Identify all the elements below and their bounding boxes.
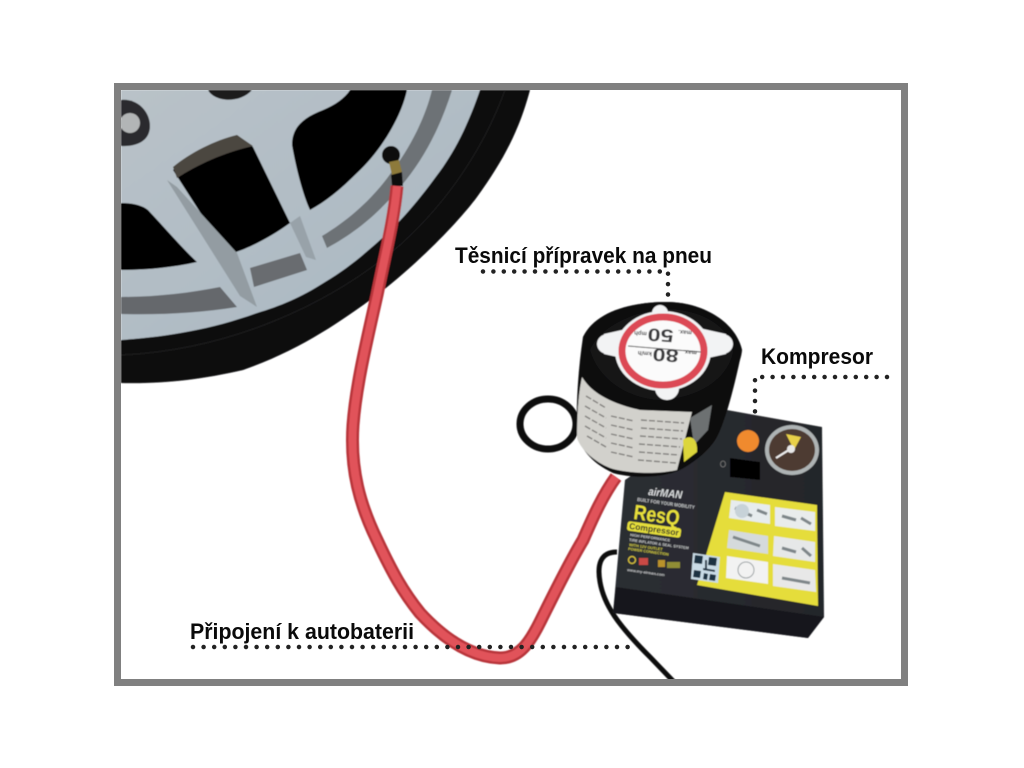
sealant canister (577, 302, 742, 477)
red hose (352, 186, 616, 658)
leader: battery (193, 645, 632, 649)
rubber ring (520, 399, 576, 449)
max 80 km/h: max. (683, 348, 697, 355)
power cable (599, 552, 674, 682)
max 80 km/h (637, 344, 697, 366)
spec text: www.my-airman.com (626, 568, 666, 577)
side label (577, 377, 692, 473)
divider line (628, 346, 701, 352)
wheel (120, 90, 530, 383)
max 50 mph: mph (634, 329, 647, 336)
grey frame (118, 86, 904, 682)
max 50 mph: 50 (647, 324, 674, 346)
max 80 km/h: km/h (637, 349, 652, 356)
upper bolt hole (208, 90, 252, 100)
inner bottle detail (690, 405, 712, 445)
white cross sticker (597, 305, 733, 400)
label: battery: Připojení k autobaterii (190, 619, 414, 644)
alloy rim (121, 90, 480, 340)
yellow bottle detail (683, 437, 697, 462)
max 80 km/h: 80 (652, 344, 679, 366)
label: sealant: Těsnicí přípravek na pneu (455, 243, 712, 268)
callout: sealant (455, 243, 712, 298)
rim channel (322, 90, 452, 248)
max 50 mph (634, 324, 692, 346)
airMAN brand: airMAN (648, 486, 684, 502)
max 50 mph: max. (678, 328, 692, 335)
spec text: HIGH PERFORMANCE (630, 533, 671, 543)
infographic (114, 83, 908, 686)
callout: compressor (755, 344, 887, 419)
orange button (737, 430, 759, 452)
spec text: WITH 12V OUTLET (629, 543, 664, 552)
ResQ logo: ResQ (632, 501, 681, 530)
Compressor pill: Compressor (629, 521, 680, 538)
pressure gauge (765, 425, 819, 475)
canister body (577, 302, 742, 477)
label: compressor: Kompresor (761, 344, 873, 369)
photo: wheel, hose and compressor (120, 90, 824, 682)
spec text (626, 533, 689, 577)
yellow instruction panel (697, 492, 818, 606)
window: centre (173, 135, 290, 253)
spec text: TIRE INFLATOR & SEAL SYSTEM (629, 538, 689, 550)
red speed ring (622, 317, 704, 385)
window: left (121, 203, 197, 270)
valve cap (382, 146, 400, 164)
compressor (613, 410, 824, 638)
leader: compressor (755, 377, 887, 419)
lid (582, 302, 742, 410)
hub bolt hole (121, 100, 150, 146)
compressor body (613, 410, 824, 638)
QR code (691, 553, 720, 583)
spec text: POWER CONNECTION (628, 547, 669, 557)
spoke shade: right (290, 216, 316, 260)
lower front (613, 587, 824, 638)
switch (720, 458, 760, 480)
spoke shade: left (167, 180, 257, 307)
tyre (121, 90, 530, 383)
window: upper right (292, 90, 407, 210)
leader: sealant (483, 272, 668, 298)
logos (628, 556, 680, 568)
tagline: BUILT FOR YOUR MOBILITY (637, 497, 696, 511)
